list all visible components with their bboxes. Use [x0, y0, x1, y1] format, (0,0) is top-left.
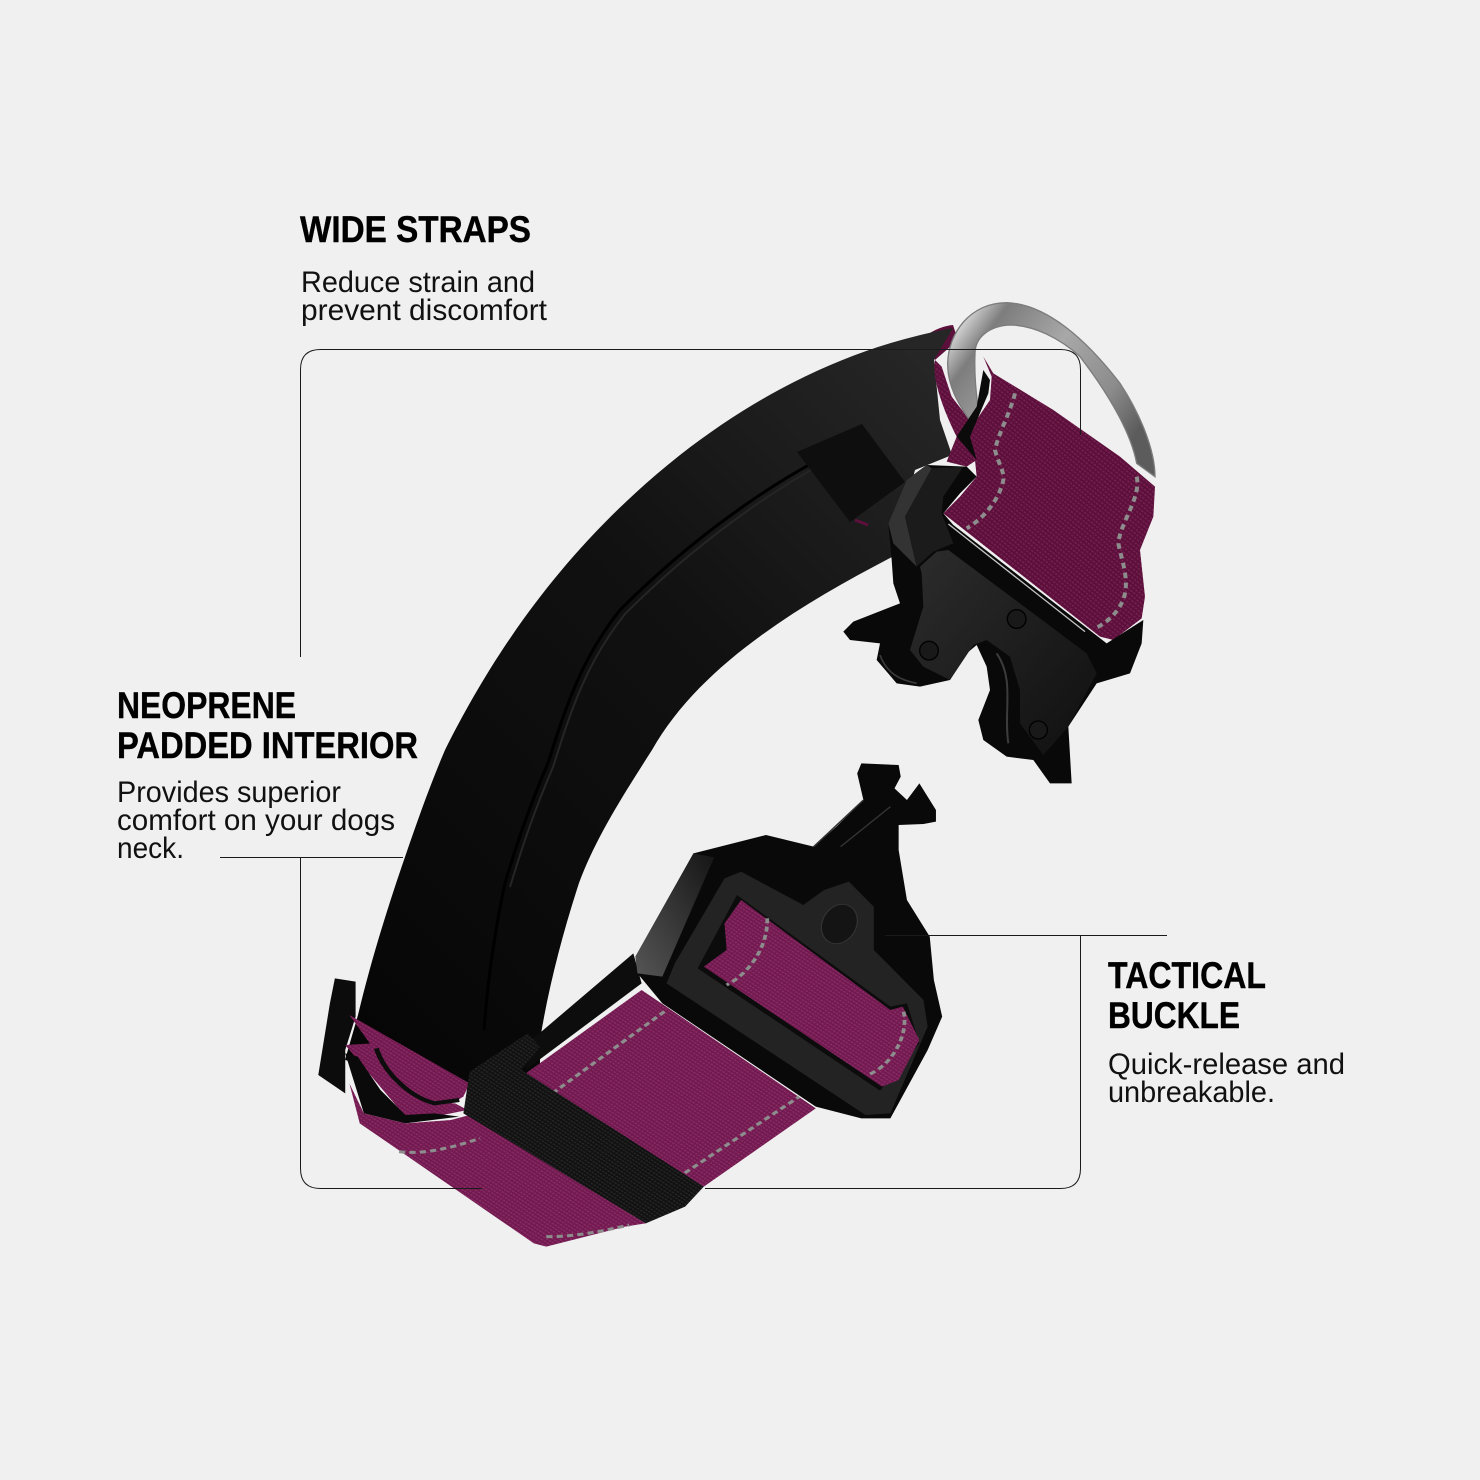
label: wide straps: prevent discomfort	[301, 294, 548, 327]
collar product illustration	[318, 303, 1155, 1247]
upper buckle	[843, 465, 1143, 783]
label: tactical buckle: unbreakable.	[1108, 1076, 1275, 1109]
lower strap band	[349, 1083, 646, 1247]
label: tactical buckle: BUCKLE	[1108, 995, 1240, 1036]
upper strap	[943, 357, 1155, 640]
label: neoprene padded interior: Provides superior	[117, 776, 341, 809]
black binding	[526, 953, 642, 1070]
strap through slot	[698, 895, 919, 1091]
matte frame	[667, 872, 928, 1115]
side slider	[318, 978, 356, 1093]
black inner fold	[957, 370, 990, 460]
reflective stitching	[399, 1010, 799, 1237]
neoprene padded band	[345, 325, 958, 1090]
label: neoprene padded interior: comfort on your dogs	[117, 804, 395, 837]
rivets	[920, 610, 1047, 739]
label: wide straps: WIDE STRAPS	[300, 209, 531, 250]
label: neoprene padded interior: neck.	[117, 832, 184, 865]
label: tactical buckle	[1108, 955, 1345, 1109]
label: neoprene padded interior	[117, 685, 418, 865]
lower strap assembly	[318, 953, 816, 1247]
reflective stitching	[967, 393, 1137, 628]
label: wide straps	[300, 209, 548, 327]
label: neoprene padded interior: PADDED INTERIOR	[117, 725, 418, 766]
rivet	[816, 901, 863, 947]
label: wide straps: Reduce strain and	[301, 266, 535, 299]
elastic keeper	[463, 1033, 704, 1223]
label: tactical buckle: TACTICAL	[1108, 955, 1266, 996]
lower buckle	[635, 763, 942, 1118]
upper strap left fold	[934, 360, 977, 467]
D-ring	[948, 303, 1155, 477]
buckle bevel	[635, 853, 714, 977]
buckle face plate	[910, 550, 1097, 755]
label: tactical buckle: Quick-release and	[1108, 1048, 1345, 1081]
folded strap end	[349, 1015, 470, 1117]
buckle bevel	[888, 465, 932, 567]
label: neoprene padded interior: NEOPRENE	[117, 685, 296, 726]
callout frame lines	[220, 350, 1167, 1188]
